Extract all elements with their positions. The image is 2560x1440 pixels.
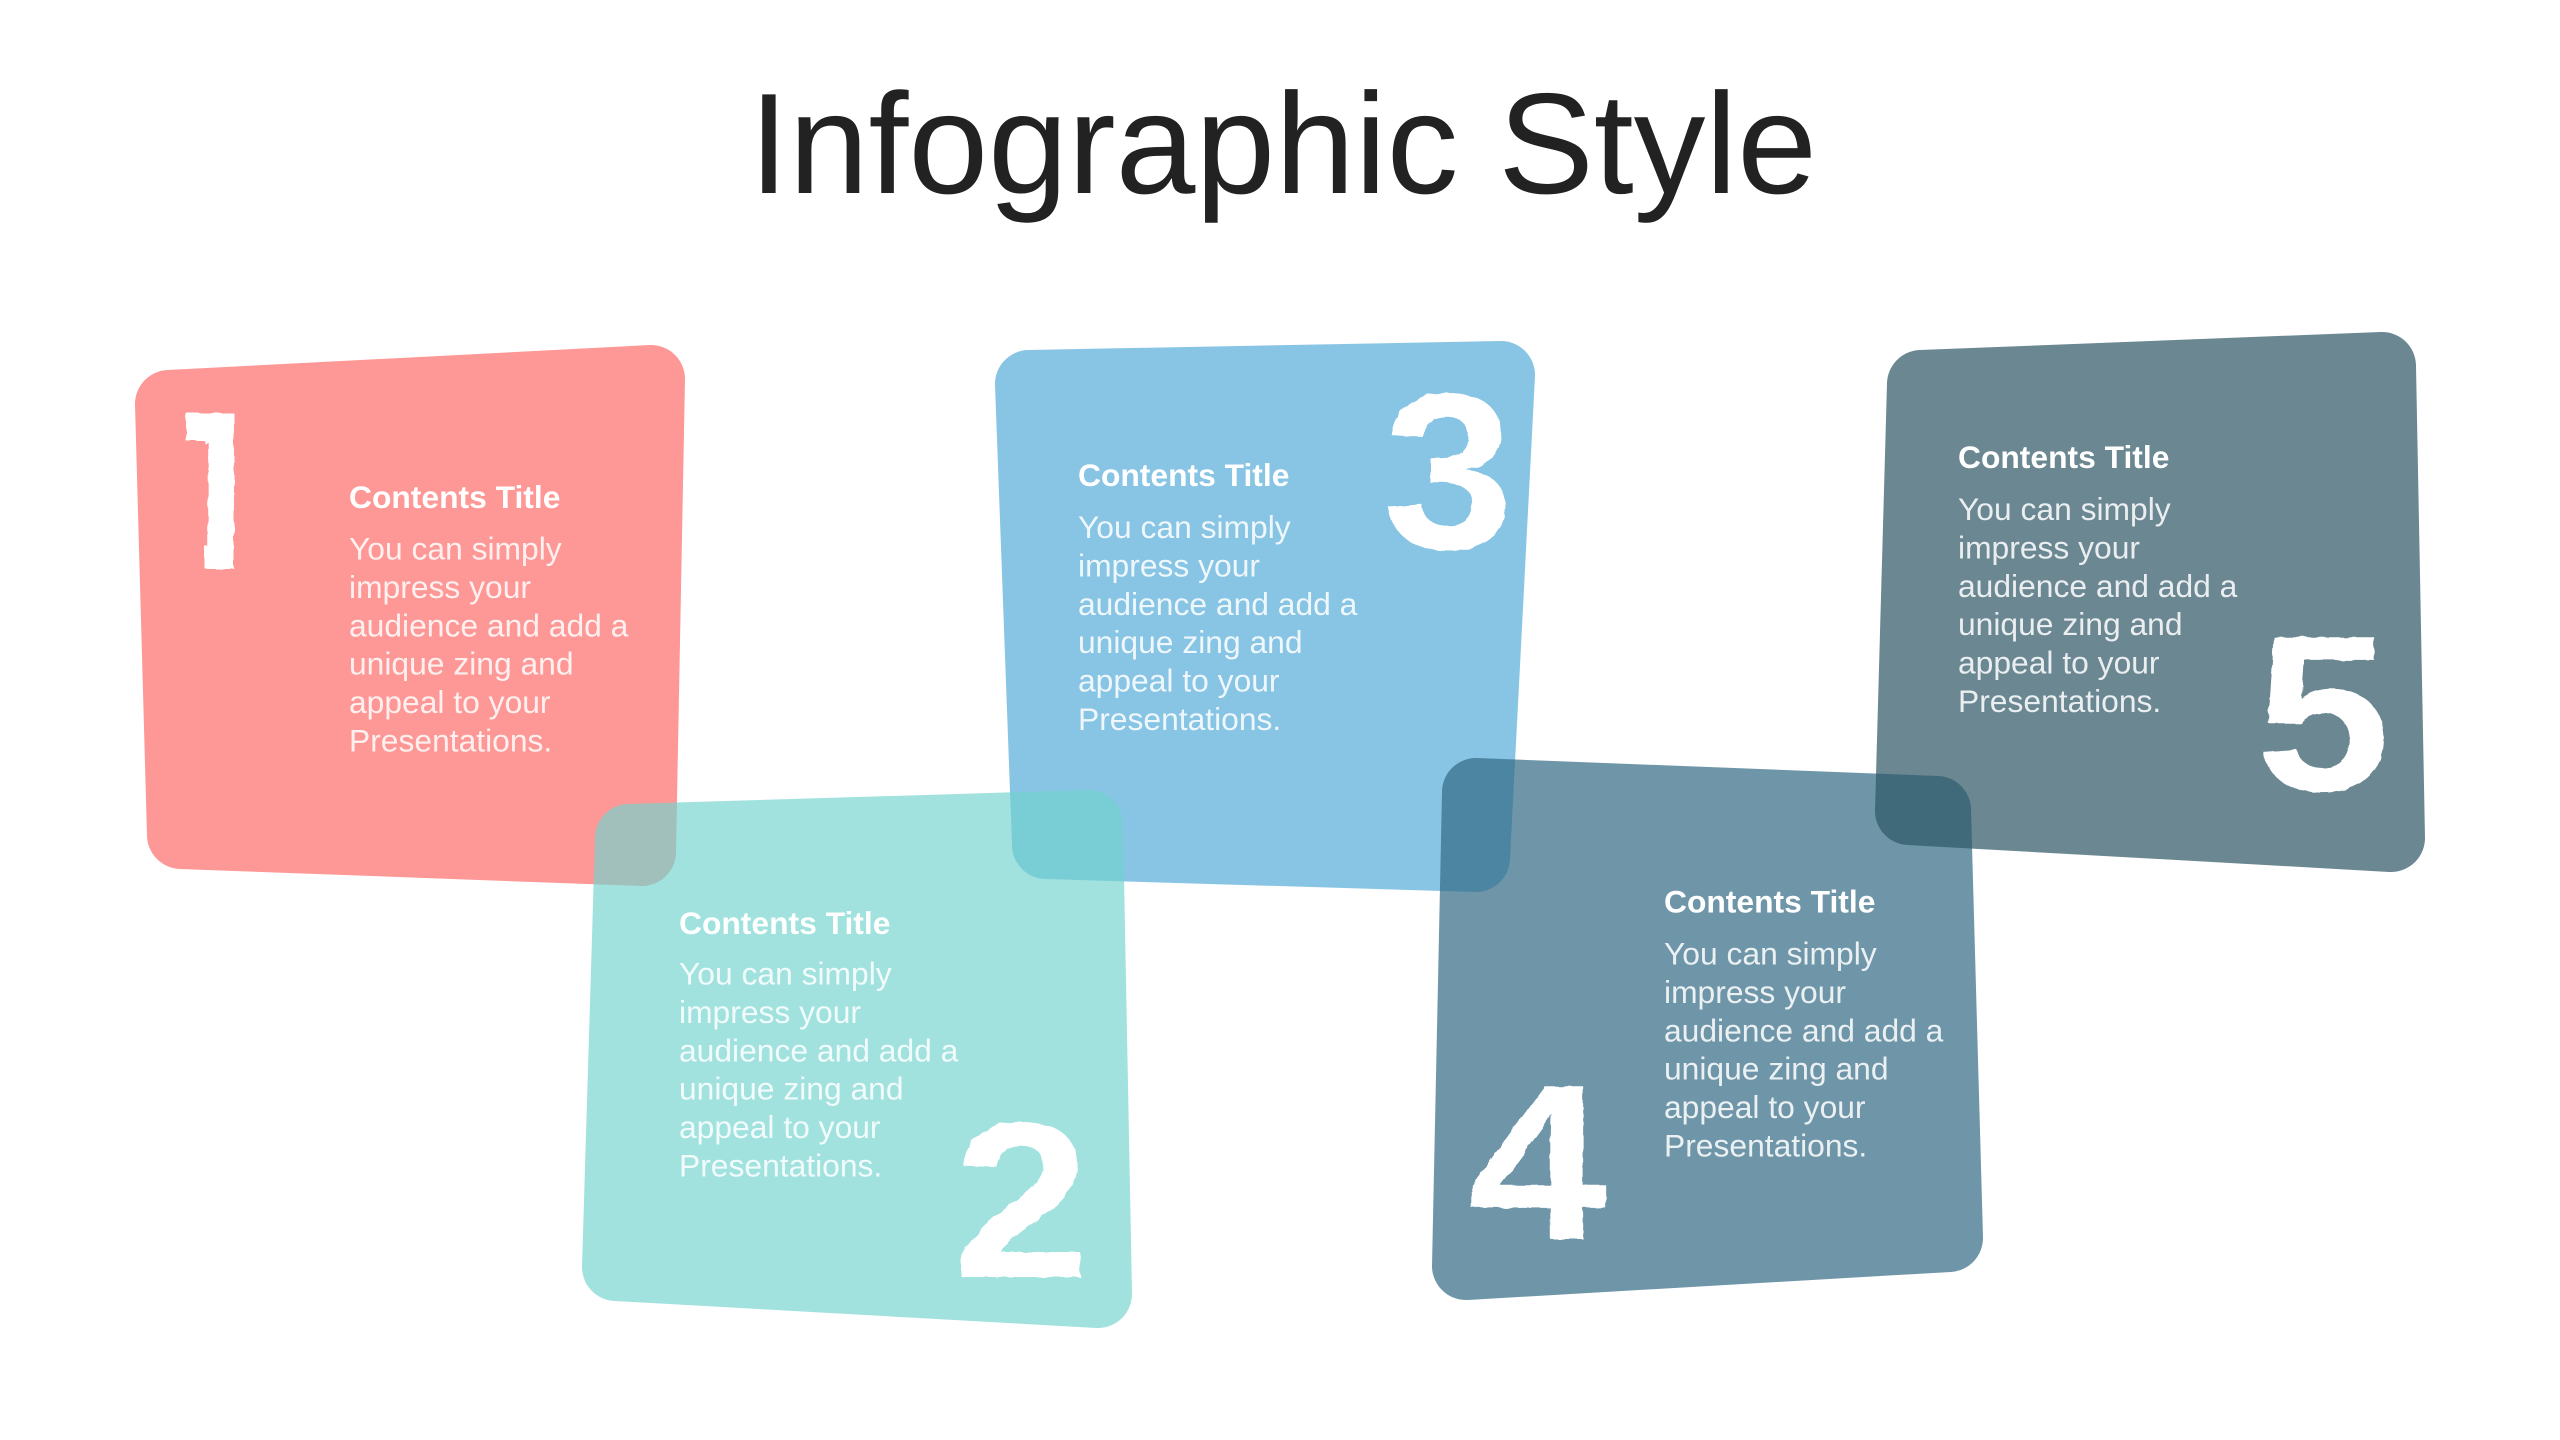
card 2 body: audience and add a [679,1032,959,1068]
card 1 body: appeal to your [349,684,551,720]
numeral 1 [185,412,235,570]
card 4 body: audience and add a [1664,1012,1944,1048]
card 2 background [616,824,1098,1294]
card 5 body: audience and add a [1958,568,2238,604]
card 5 body: unique zing and [1958,606,2183,642]
panel: card 1 [160,369,651,852]
card 4 body: appeal to your [1664,1089,1866,1125]
panel: card 3 [1029,348,1514,858]
card 5 heading: Contents Title [1958,439,2169,475]
card 1 body: audience and add a [349,608,629,644]
card 1 body: unique zing and [349,646,574,682]
card 1 body: impress your [349,569,531,605]
card 5 body: impress your [1958,530,2140,566]
card 2 body: impress your [679,994,861,1030]
panel: card 5 [1909,366,2391,838]
card 5 background [1909,366,2391,838]
panel: card 4 [1466,792,1949,1287]
card 1 body: Presentations. [349,722,552,758]
numeral 5: 5 [2256,590,2391,838]
numeral 3: 3 [1383,348,1514,596]
card 1 heading: Contents Title [349,479,560,515]
numeral 2: 2 [953,1076,1090,1324]
card 4 body: Presentations. [1664,1128,1867,1164]
card 4 background [1466,792,1949,1266]
card 2 body: unique zing and [679,1070,904,1106]
card 3 body: You can simply [1078,509,1291,545]
card 3 body: unique zing and [1078,624,1303,660]
panel: card 2 [616,824,1098,1324]
card 4 body: You can simply [1664,936,1877,972]
card 3 heading: Contents Title [1078,457,1289,493]
card 2 heading: Contents Title [679,905,890,941]
numeral 4: 4 [1468,1039,1608,1287]
title: Infographic Style [749,64,1817,224]
card 3 body: impress your [1078,548,1260,584]
numeral 1: 1 [160,369,275,617]
card 4 body: unique zing and [1664,1050,1889,1086]
card 1 body: You can simply [349,530,562,566]
card 2 body: Presentations. [679,1148,882,1184]
card 1 background [169,379,651,852]
card 4 body: impress your [1664,974,1846,1010]
card 2 body: appeal to your [679,1109,881,1145]
card 3 background [1029,375,1501,858]
card 5 body: Presentations. [1958,683,2161,719]
card 3 body: appeal to your [1078,662,1280,698]
card 2 body: You can simply [679,956,892,992]
card 4 heading: Contents Title [1664,884,1875,920]
card 5 body: You can simply [1958,491,2171,527]
card 5 body: appeal to your [1958,644,2160,680]
card 3 body: audience and add a [1078,586,1358,622]
card 3 body: Presentations. [1078,701,1281,737]
